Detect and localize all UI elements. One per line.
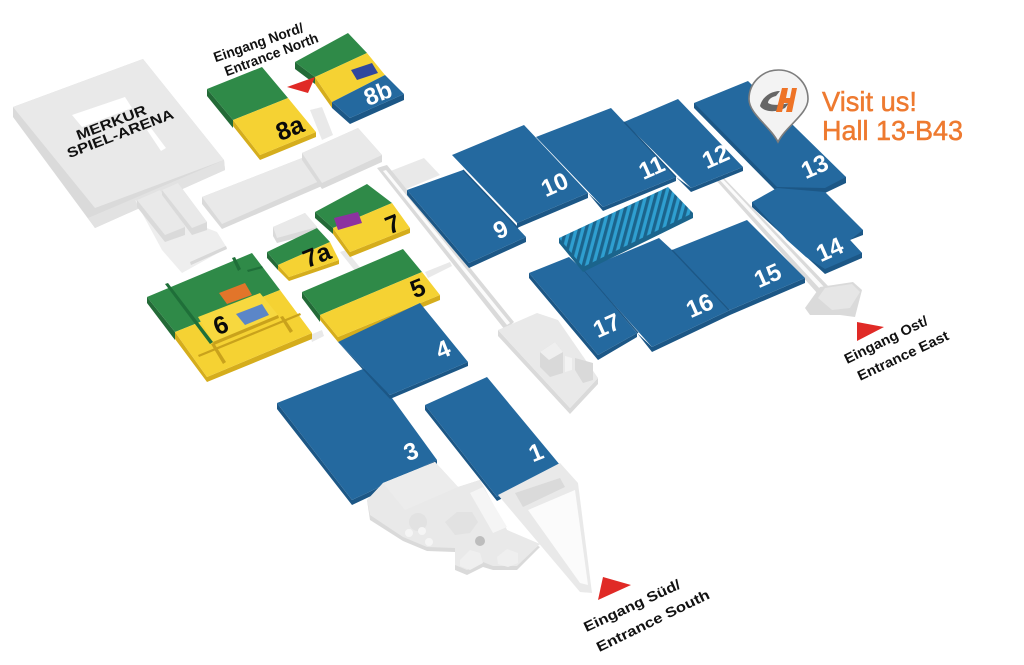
label: south entrance: Eingang Süd/: [581, 576, 683, 635]
arrow: south entrance: [598, 577, 631, 600]
label 6: 6: [209, 310, 233, 341]
arena name: SPIEL-ARENA: [65, 106, 176, 161]
label 17: 17: [589, 308, 625, 344]
label 7: 7: [381, 209, 405, 240]
hall 11: [536, 108, 676, 211]
building: south entrance complex: [367, 462, 540, 575]
hall 13: [694, 81, 846, 193]
label 15: 15: [750, 258, 786, 294]
hall 10: [452, 125, 588, 228]
label: south entrance: [581, 576, 712, 655]
building: central atrium: [498, 313, 598, 414]
label 4: 4: [432, 335, 455, 365]
callout: visit us: Visit us!: [822, 86, 917, 117]
label: north entrance: Entrance North: [222, 29, 320, 79]
hall 14: [752, 188, 863, 274]
label 3: 3: [400, 437, 422, 467]
hall 7a: [267, 228, 339, 281]
hatched hall: [559, 187, 693, 272]
building: east entrance: [805, 282, 862, 317]
icon: location pin with logo: [749, 70, 808, 142]
hall 6: [147, 253, 312, 382]
building: Merkur Spiel-Arena: [13, 59, 225, 228]
hall 3: [277, 367, 437, 505]
label 9: 9: [489, 215, 513, 245]
label 5: 5: [406, 273, 430, 304]
label 11: 11: [635, 151, 669, 186]
walkways: grey connectors around the arena: [135, 107, 440, 273]
label: east entrance: Eingang Ost/: [841, 312, 930, 367]
hall 16: [583, 238, 730, 352]
hall 8a: [207, 67, 316, 160]
hall 4: [338, 303, 468, 399]
building: south entrance wedge: [498, 463, 592, 593]
label 7a: 7a: [299, 237, 336, 274]
label 1: 1: [525, 438, 547, 468]
label 8a: 8a: [272, 110, 309, 147]
arena name: [65, 102, 176, 161]
hall 17: [529, 257, 637, 360]
label 10: 10: [537, 167, 573, 203]
label 12: 12: [698, 139, 734, 175]
arrow: north entrance: [287, 77, 315, 93]
label 13: 13: [797, 149, 833, 185]
label: north entrance: Eingang Nord/: [211, 19, 306, 65]
hall 9: [407, 170, 526, 268]
arena name: MERKUR: [74, 102, 149, 143]
label: south entrance: Entrance South: [594, 586, 712, 655]
label: east entrance: Entrance East: [855, 327, 951, 384]
hall 7: [315, 184, 410, 257]
hall 1: [425, 377, 560, 501]
label 8b: 8b: [360, 76, 396, 112]
callout: visit us: Hall 13-B43: [822, 115, 963, 146]
walkway: central strip to the atrium: [310, 165, 830, 342]
callout: visit us: [822, 86, 963, 146]
hall 15: [672, 220, 805, 315]
label 16: 16: [682, 288, 718, 324]
arrow: east entrance: [857, 322, 884, 341]
hall 5: [302, 249, 440, 342]
hall 8b: [295, 33, 404, 124]
label: east entrance: [841, 312, 951, 384]
label 14: 14: [812, 232, 848, 268]
hall 12: [624, 99, 743, 192]
